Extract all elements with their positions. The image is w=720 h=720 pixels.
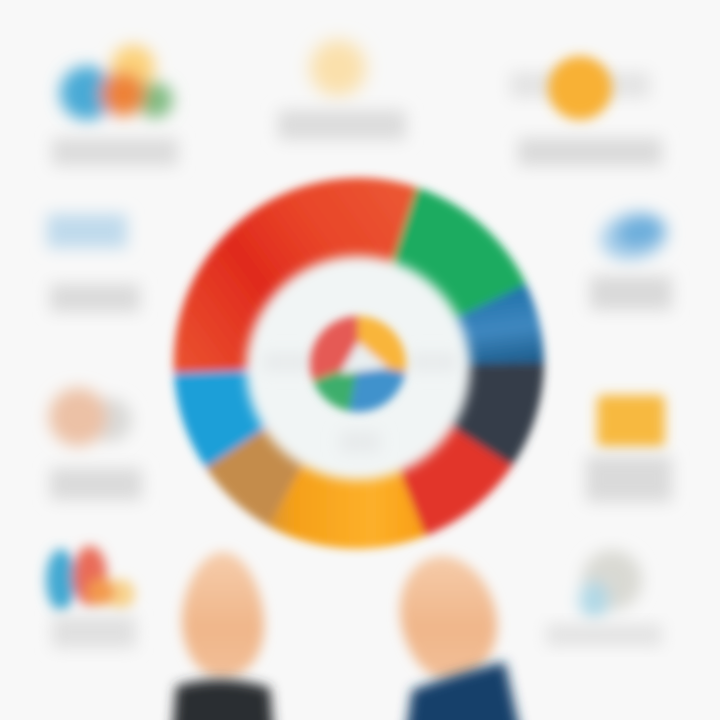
icon: overlapping colour circles, top left [60, 45, 173, 120]
segment: red [174, 178, 417, 373]
segment: brown [206, 366, 358, 526]
caption: second row left [50, 284, 140, 312]
segment: green [358, 187, 526, 366]
icon: light blue block, second row left [47, 214, 127, 248]
caption: third row right [586, 456, 672, 502]
icon: blue cloud, second row right [596, 205, 672, 267]
icon: peach circle, third row left [49, 388, 132, 446]
segment: dark [358, 363, 544, 466]
hand: left [182, 552, 264, 678]
segment: blue [358, 284, 544, 366]
segment: red lower [358, 366, 512, 536]
icon: colour wedges, fourth row left [46, 546, 135, 611]
donut centre disc [246, 256, 470, 480]
sleeve: left [172, 679, 274, 720]
centre faint labels [262, 354, 458, 452]
segment: yellow [268, 366, 425, 549]
caption: fourth row left [52, 616, 136, 648]
caption: second row right [590, 276, 672, 310]
caption: third row left [50, 468, 142, 500]
caption: top centre [278, 110, 406, 140]
hand: right [400, 556, 497, 680]
donut chart [174, 178, 544, 549]
centre pie icon [310, 316, 406, 412]
caption: top right [518, 138, 662, 166]
icon: pale globe, fourth row right [579, 550, 642, 619]
sleeve: right [405, 662, 522, 720]
icon: orange circle with side strips, top right [510, 56, 650, 120]
caption: top left [52, 138, 178, 166]
caption: fourth row right [546, 624, 662, 646]
icon: yellow card, third row right [597, 395, 665, 447]
icon: pale yellow circle, top centre [310, 40, 366, 96]
segment: light blue [174, 366, 358, 468]
